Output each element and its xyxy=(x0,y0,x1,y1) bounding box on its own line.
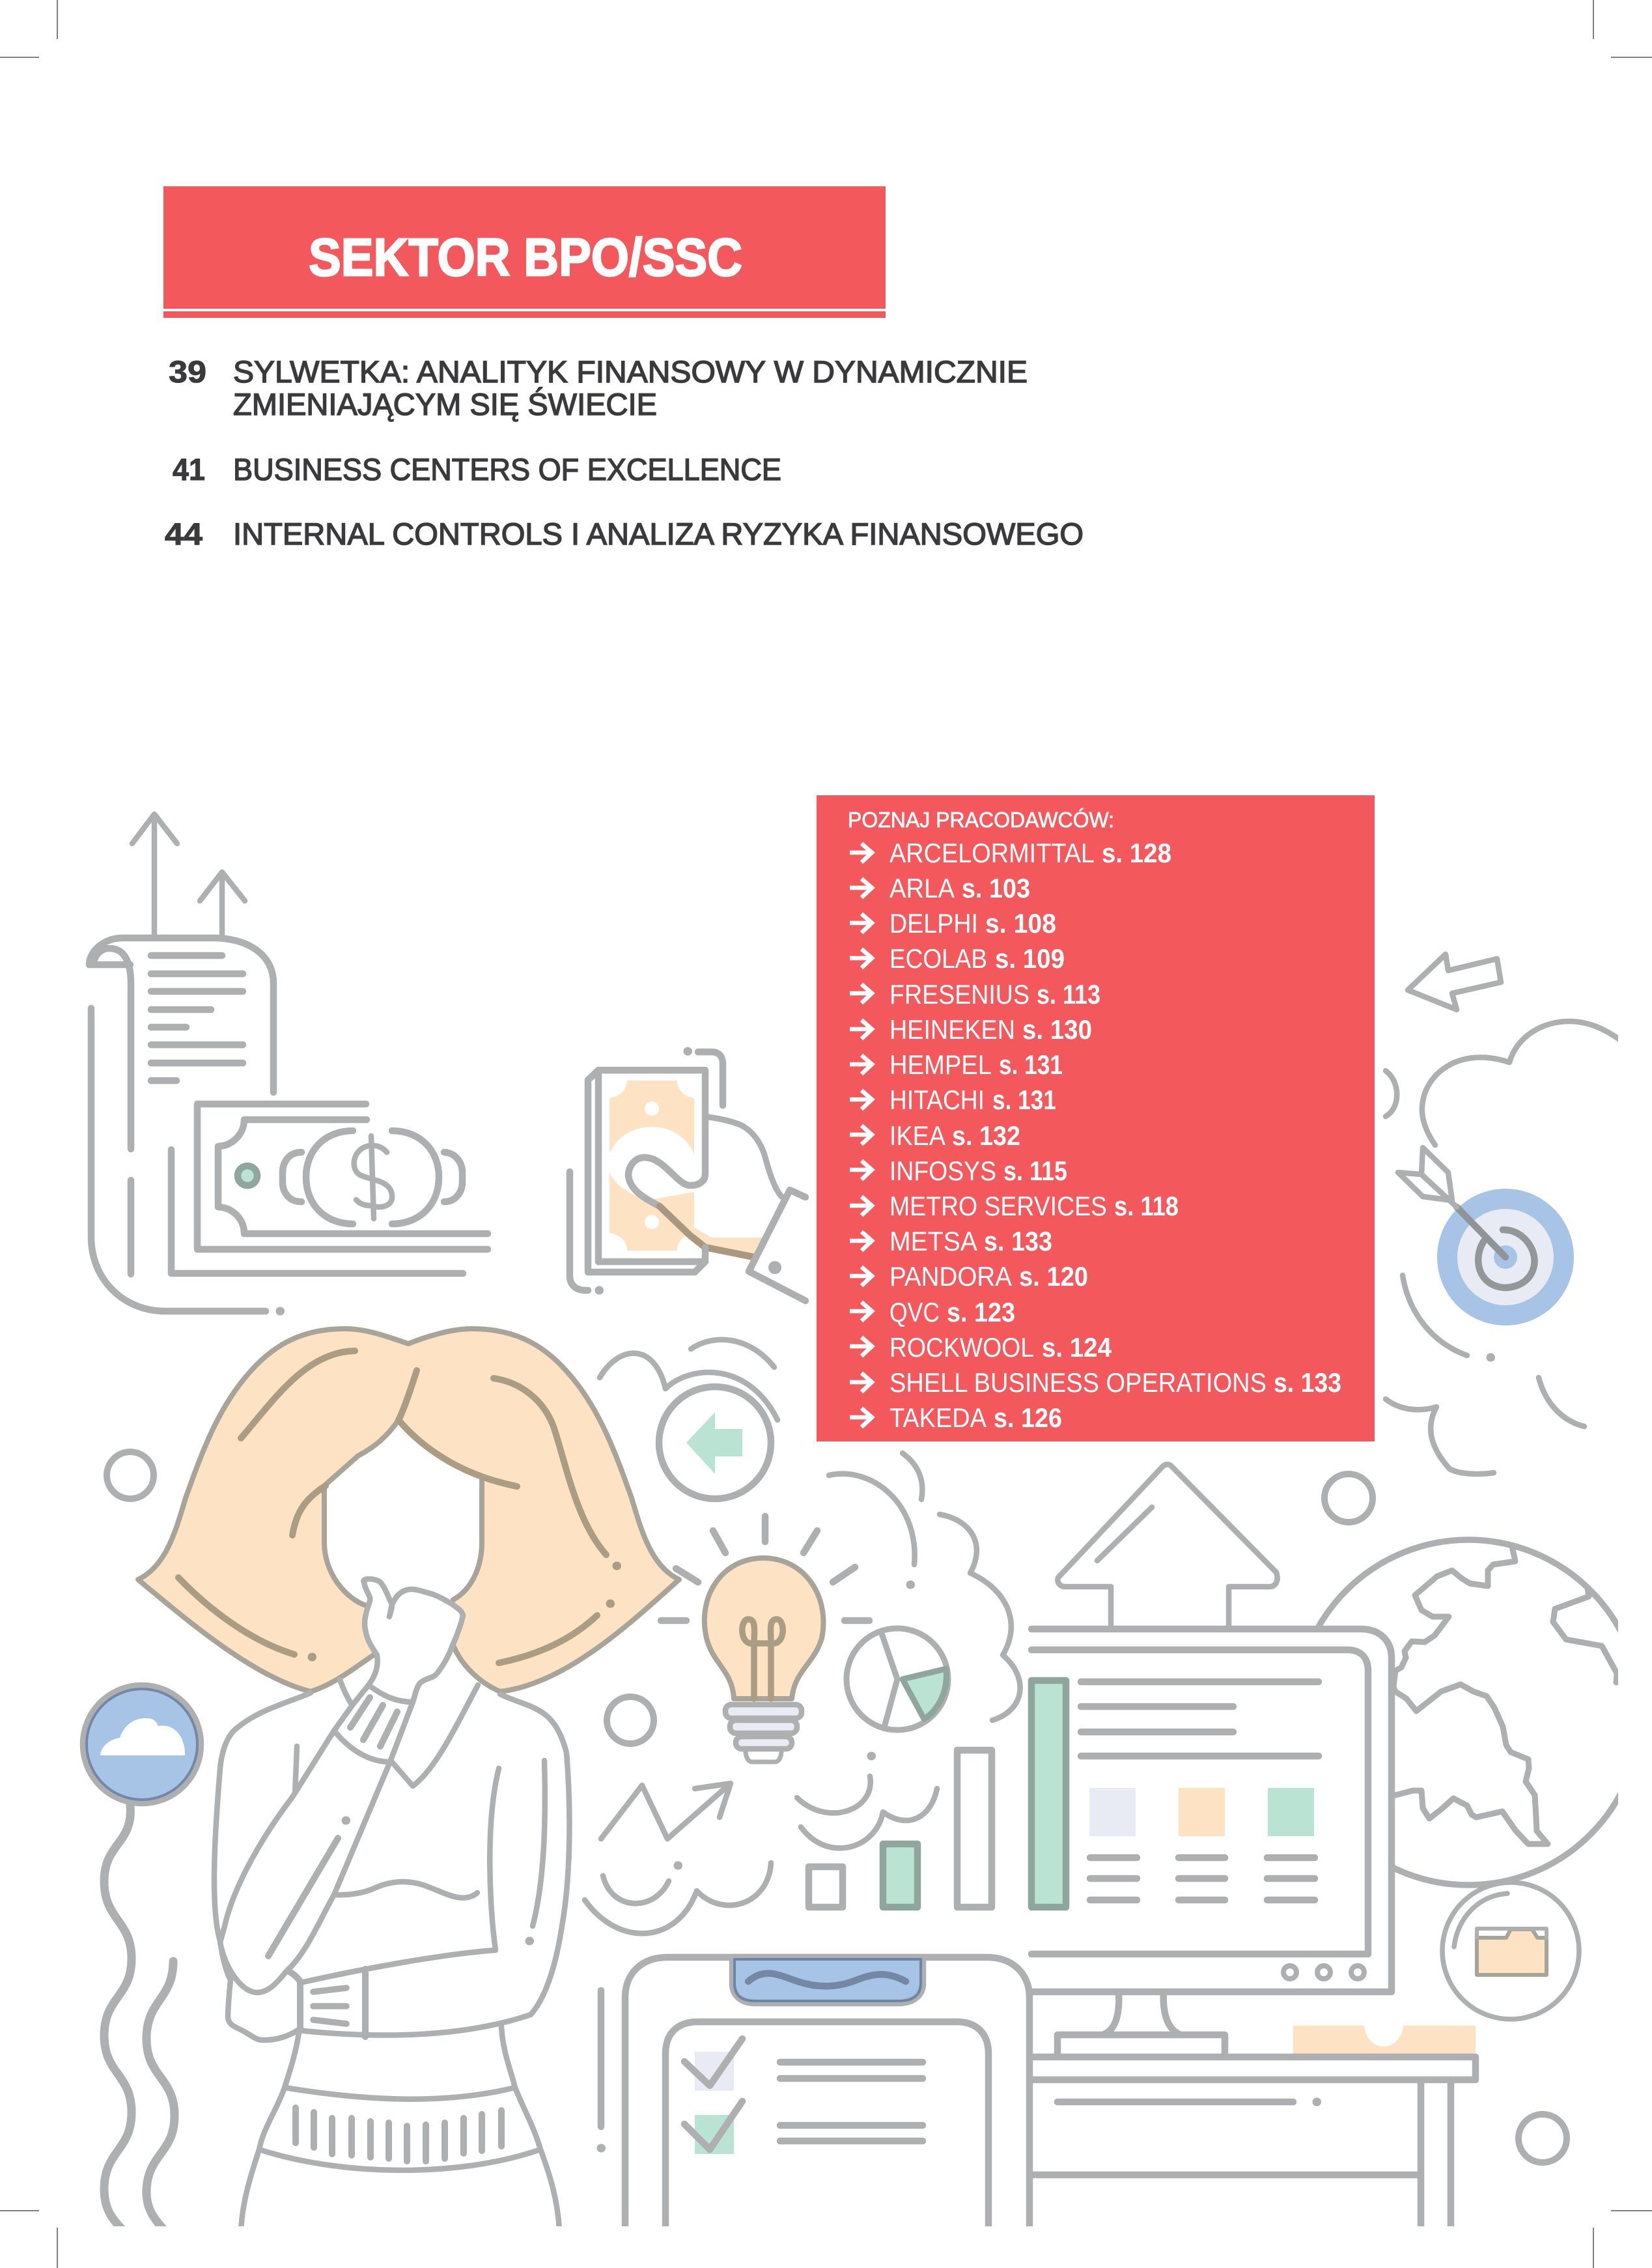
list rows: s. 126 xyxy=(994,1402,1062,1433)
list rows: QVC xyxy=(889,1297,940,1327)
table of contents: 39 xyxy=(169,354,206,389)
list rows: DELPHI xyxy=(889,908,978,939)
hair xyxy=(138,1329,679,1692)
list rows: s. 130 xyxy=(1022,1014,1092,1045)
table of contents: ZMIENIAJĄCYM SIĘ ŚWIECIE xyxy=(233,387,657,421)
list rows: SHELL BUSINESS OPERATIONS xyxy=(889,1367,1267,1398)
list rows: ROCKWOOL xyxy=(889,1332,1034,1363)
list rows: IKEA xyxy=(889,1120,945,1151)
bar chart xyxy=(809,1680,1066,1907)
icon: growth arrows xyxy=(132,814,245,935)
list rows: s. 133 xyxy=(1274,1367,1341,1398)
list rows: s. 128 xyxy=(1102,838,1171,868)
icon: light bulb xyxy=(661,1516,869,1762)
list rows: s. 133 xyxy=(984,1226,1052,1256)
hair dots xyxy=(312,1566,617,1657)
list rows: TAKEDA xyxy=(889,1402,987,1433)
table of contents: SYLWETKA: ANALITYK FINANSOWY W DYNAMICZNIE xyxy=(233,354,1028,389)
table of contents: 41 xyxy=(173,452,205,487)
icon: paper scroll xyxy=(89,938,273,1311)
icon: target xyxy=(1398,1148,1574,1325)
person: body xyxy=(214,1680,569,2040)
list rows: FRESENIUS xyxy=(889,979,1029,1010)
table of contents: 44 xyxy=(165,517,203,551)
desk with monitor stand xyxy=(1031,1992,1476,2231)
icon: trend arrow xyxy=(601,1783,731,1839)
list rows: INFOSYS xyxy=(889,1155,996,1186)
list rows: s. 103 xyxy=(962,873,1030,903)
person: waist and belt xyxy=(241,2026,559,2231)
icon: small rings xyxy=(107,1452,1567,2162)
icon: pie chart xyxy=(847,1628,948,1730)
list rows: s. 109 xyxy=(995,943,1065,974)
decorative dots xyxy=(280,1051,1491,2148)
illustration xyxy=(83,814,1641,2234)
wavy lines xyxy=(104,1806,175,2234)
list rows: ECOLAB xyxy=(889,943,987,974)
list rows: s. 113 xyxy=(1037,979,1100,1010)
list rows: ARLA xyxy=(889,873,955,903)
icon: clipboard with checklist xyxy=(601,1957,1029,2231)
wave curves xyxy=(585,1776,937,1933)
list rows: HEINEKEN xyxy=(889,1014,1015,1045)
list rows: s. 132 xyxy=(952,1120,1020,1151)
list rows: s. 123 xyxy=(947,1297,1015,1327)
icon: folder circle xyxy=(1442,1882,1579,2019)
monitor xyxy=(1031,1629,1392,1992)
list rows: s. 124 xyxy=(1042,1332,1112,1363)
list rows: HEMPEL xyxy=(889,1049,992,1080)
list rows: METRO SERVICES xyxy=(889,1191,1107,1221)
icon: left arrow outline xyxy=(1408,954,1501,1010)
table of contents xyxy=(165,354,1084,551)
list rows: METSA xyxy=(889,1226,977,1256)
icon: back arrow circle xyxy=(600,1340,777,1499)
panel: employers list xyxy=(817,795,1375,1441)
list rows xyxy=(889,838,1341,1433)
list rows: ARCELORMITTAL xyxy=(889,838,1095,868)
header banner xyxy=(163,186,886,318)
icon: big up arrow xyxy=(1057,1464,1278,1629)
person: raised arm and hand xyxy=(220,1579,463,1992)
arrows xyxy=(850,843,872,1427)
icon: hand holding money xyxy=(570,1052,805,1301)
list rows: s. 118 xyxy=(1114,1191,1179,1221)
list rows: s. 131 xyxy=(992,1084,1056,1115)
title: SEKTOR BPO/SSC xyxy=(309,228,742,287)
list rows: s. 131 xyxy=(999,1049,1063,1080)
thought cloud xyxy=(829,1453,1020,1720)
list rows: s. 115 xyxy=(1003,1155,1067,1186)
globe xyxy=(1296,1540,1641,1885)
icon: banknote xyxy=(171,1104,488,1273)
icon: cloud outline xyxy=(1386,1021,1621,1474)
list rows: HITACHI xyxy=(889,1084,985,1115)
icon: cloud badge xyxy=(83,1686,201,1803)
list rows: PANDORA xyxy=(889,1261,1012,1292)
list rows: s. 120 xyxy=(1019,1261,1088,1292)
table of contents: INTERNAL CONTROLS I ANALIZA RYZYKA FINANSOWEGO xyxy=(233,517,1084,551)
list rows: s. 108 xyxy=(985,908,1056,939)
table of contents: BUSINESS CENTERS OF EXCELLENCE xyxy=(233,452,781,487)
list heading: POZNAJ PRACODAWCÓW: xyxy=(848,808,1114,832)
